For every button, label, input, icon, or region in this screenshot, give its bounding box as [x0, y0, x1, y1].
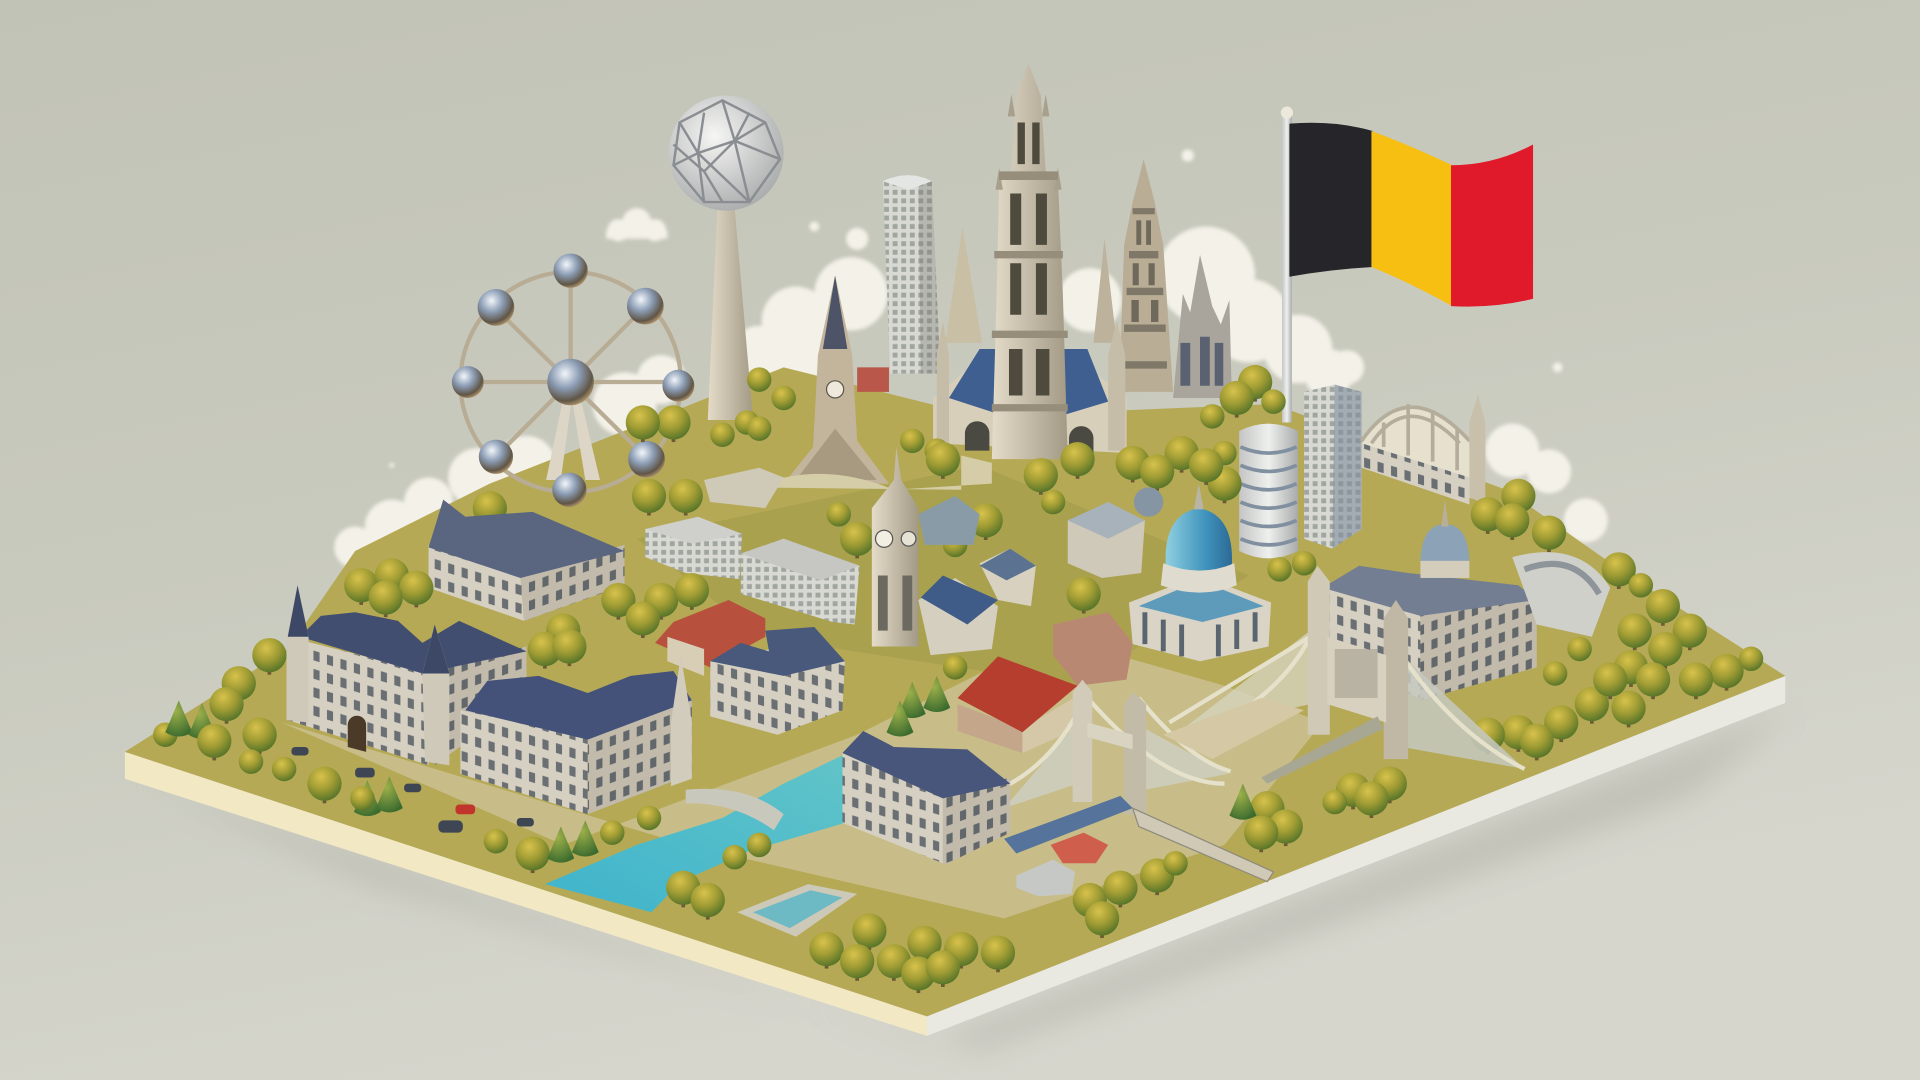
- front wall: [460, 710, 588, 814]
- flag: red stripe: [1451, 144, 1533, 307]
- platform: [125, 367, 1785, 1036]
- tower bridges: [998, 566, 1524, 882]
- cathedral tower: [992, 64, 1068, 459]
- trees: middle: [344, 551, 1763, 760]
- arched doors: [965, 421, 1093, 456]
- ground surface: [125, 367, 1785, 1016]
- front turret: [422, 624, 449, 765]
- chateau roof: [300, 612, 527, 673]
- cathedral nave: [933, 349, 1127, 453]
- small spire: [1093, 239, 1117, 343]
- trees: back hill: [473, 365, 1653, 598]
- tower openings: [1009, 122, 1049, 396]
- building: front chateau: [460, 655, 692, 814]
- platform shadow: [135, 710, 1790, 1051]
- cable fans: [1176, 631, 1310, 735]
- tan paved areas: [282, 637, 1322, 918]
- roof: [1322, 566, 1537, 616]
- side wall: [520, 545, 624, 621]
- cloud: behind cathedral: [1058, 149, 1353, 398]
- front wall: [1316, 585, 1420, 698]
- tower 1: [1073, 680, 1092, 802]
- roof: [429, 500, 624, 578]
- trees: front: [153, 638, 1407, 993]
- red timber building: [958, 656, 1084, 753]
- platform left edge: [125, 752, 927, 1036]
- sphere tower: [669, 96, 784, 420]
- tower 2: [1308, 566, 1330, 735]
- flag: yellow stripe: [1371, 131, 1452, 306]
- bridge cables: [998, 637, 1524, 790]
- building: back left chateau: [429, 500, 624, 621]
- chateau side wall: [422, 647, 527, 765]
- tower pinnacles: [996, 94, 1062, 190]
- road decks: [1004, 796, 1133, 853]
- flag pole: [1282, 110, 1292, 422]
- cloud: behind tower: [730, 222, 888, 398]
- atomium spheres: [452, 253, 694, 507]
- cloud: behind atomium: [334, 355, 752, 568]
- building: left chateau: [287, 585, 527, 765]
- small pavilion and bridge: [686, 789, 1108, 937]
- round tower: [1239, 424, 1298, 558]
- atomium legs: [546, 398, 600, 480]
- cloud: right: [1330, 350, 1608, 542]
- building: mid offices: [645, 517, 860, 624]
- stadium: [1512, 552, 1610, 637]
- spires right of cathedral: [1093, 159, 1232, 398]
- flag: [1281, 107, 1533, 422]
- arch bridge station: [1362, 394, 1485, 504]
- corner turret: [671, 655, 692, 786]
- cars on road: [291, 747, 534, 833]
- clock tower: [872, 447, 918, 647]
- blue dome building: [1129, 484, 1271, 661]
- terrace: [753, 456, 992, 490]
- church with clock: [704, 276, 992, 508]
- geodesic sphere: [669, 96, 784, 211]
- side wall: [588, 698, 692, 814]
- clouds: [334, 149, 1608, 568]
- river: [545, 751, 852, 912]
- cloud: small upper left: [606, 208, 667, 241]
- building: red roof houses: [655, 600, 845, 735]
- gothic twin spires: [1173, 255, 1232, 398]
- main right spire: [1119, 159, 1173, 392]
- cathedral: [933, 64, 1127, 459]
- door: [348, 716, 366, 752]
- platform right edge: [927, 676, 1785, 1036]
- right towers: [1239, 384, 1362, 558]
- atomium: [452, 253, 694, 507]
- palace dome: [1420, 524, 1469, 566]
- glass tower: [1304, 384, 1362, 549]
- small buildings centre: [918, 487, 1163, 686]
- front wall: [429, 545, 524, 621]
- atomium ring and struts: [460, 271, 681, 492]
- side wall: [1420, 598, 1537, 700]
- right palace: [1316, 500, 1610, 700]
- building: bottom centre hall: [842, 731, 1010, 866]
- chateau front wall: [288, 637, 429, 765]
- flag: black stripe: [1289, 123, 1373, 277]
- spire behind cathedral: [945, 227, 982, 343]
- side turrets: [937, 321, 1125, 451]
- left turret: [287, 585, 309, 722]
- skyscraper: left cylinder: [883, 175, 940, 373]
- cathedral blue roofs: [949, 349, 1108, 416]
- roof: [465, 671, 692, 740]
- tower shaft: [708, 208, 753, 420]
